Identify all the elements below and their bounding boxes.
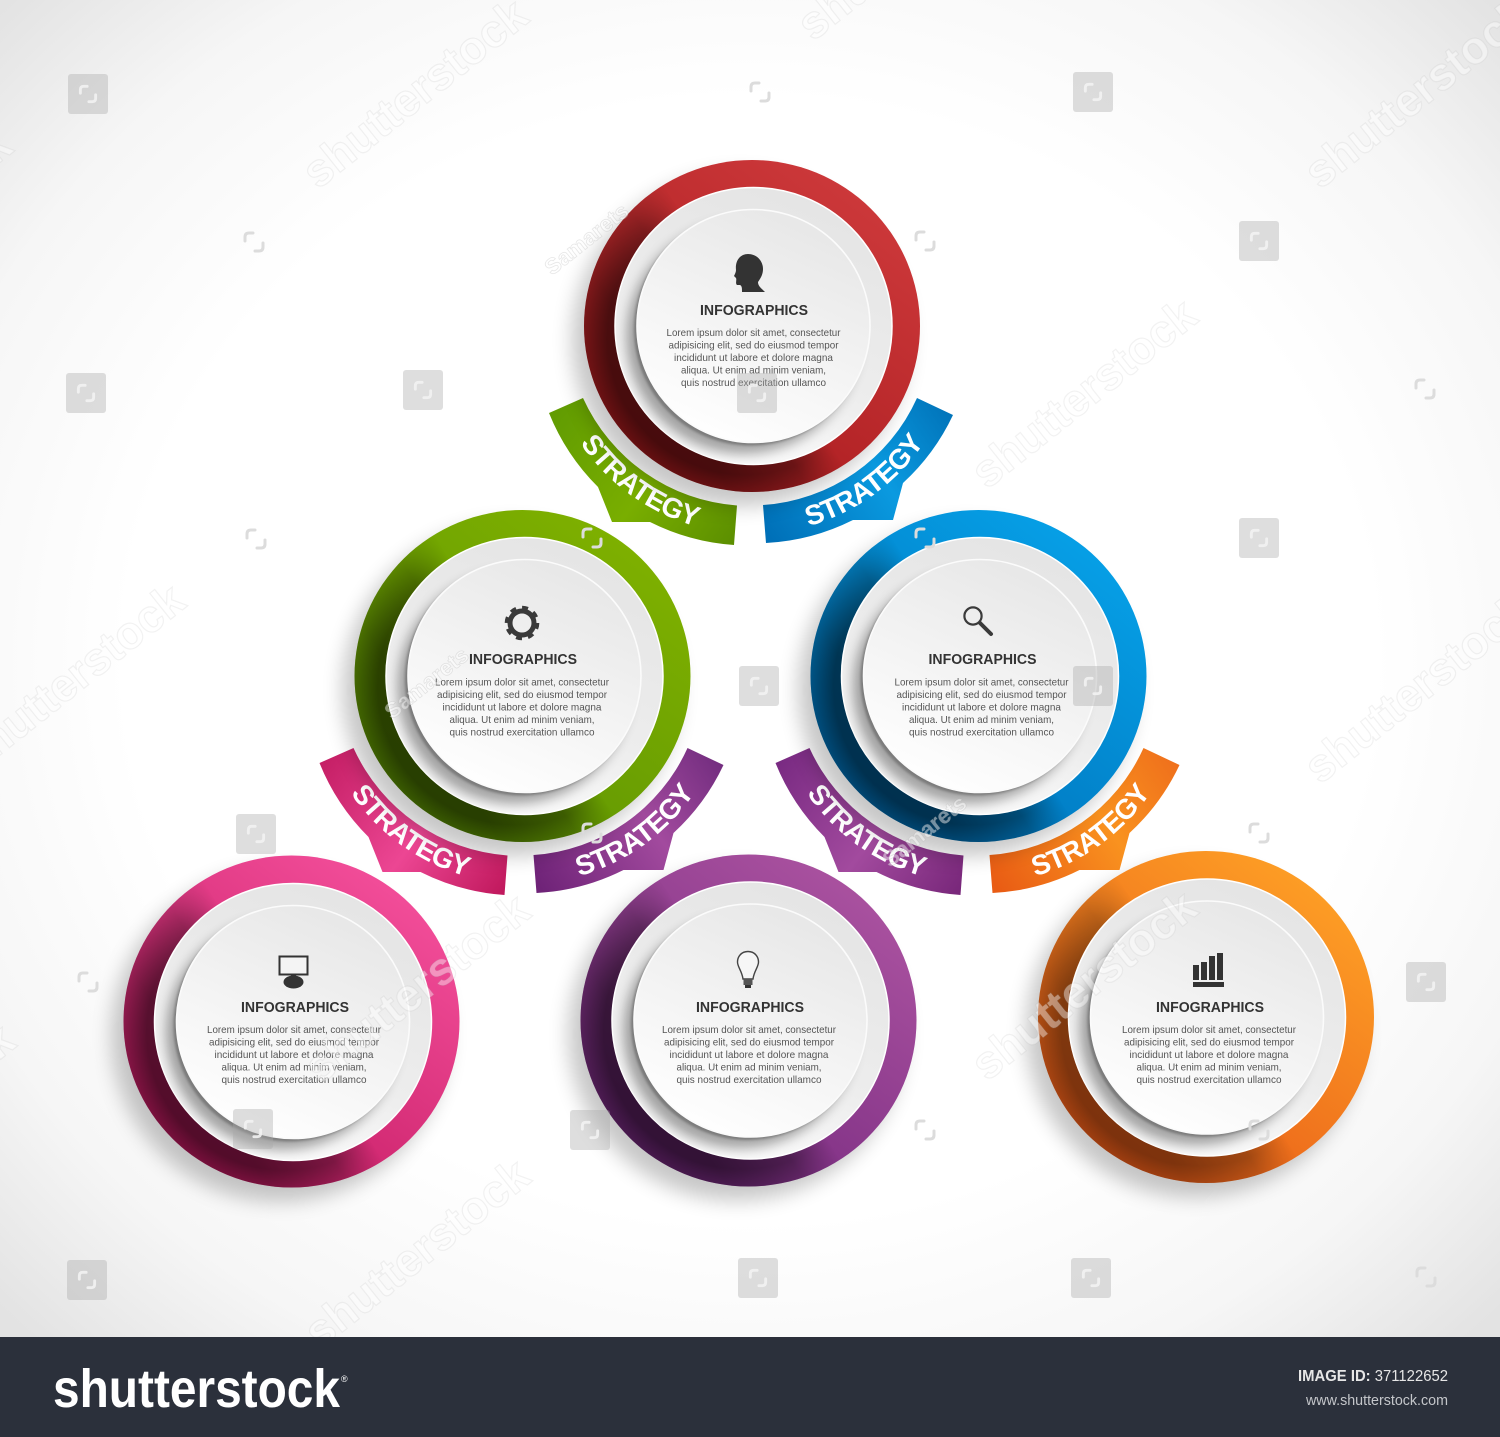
ribbon: pink strategy bbox=[320, 748, 508, 895]
watermark: stock text: Samarets bbox=[878, 790, 971, 872]
watermark: stock text: shutterstock bbox=[294, 883, 539, 1093]
circle: purple bbox=[548, 820, 948, 1220]
text: purple card bbox=[662, 1000, 837, 1086]
circle: red bbox=[552, 126, 952, 526]
ribbon group: red circle ribbons bbox=[549, 398, 953, 545]
text: red card: quis nostrud exercitation ullamco bbox=[681, 378, 826, 389]
icon: gear bbox=[506, 608, 538, 638]
text: green card: adipisicing elit, sed do eiusmod tempor bbox=[437, 690, 608, 701]
text: orange card: adipisicing elit, sed do eiusmod tempor bbox=[1124, 1038, 1295, 1048]
ribbon: purple strategy left: STRATEGY bbox=[809, 785, 928, 874]
text: orange card: Lorem ipsum dolor sit amet, consectetur bbox=[1122, 1025, 1297, 1036]
ribbon: orange strategy: STRATEGY bbox=[1032, 782, 1146, 874]
text: orange card: aliqua. Ut enim ad minim veniam, bbox=[1136, 1062, 1282, 1074]
text: purple card: quis nostrud exercitation ullamco bbox=[676, 1075, 822, 1086]
text: blue card: adipisicing elit, sed do eiusmod tempor bbox=[896, 690, 1067, 701]
text: purple card: aliqua. Ut enim ad minim veniam, bbox=[676, 1062, 822, 1074]
text: purple card: INFOGRAPHICS bbox=[696, 1000, 804, 1016]
text: pink card: adipisicing elit, sed do eiusmod tempor bbox=[209, 1038, 380, 1048]
text: red card: adipisicing elit, sed do eiusmod tempor bbox=[668, 340, 839, 352]
text: red card: Lorem ipsum dolor sit amet, consectetur bbox=[666, 328, 841, 339]
footer image id: IMAGE ID: 371122652 bbox=[1298, 1368, 1448, 1385]
watermark: stamps bbox=[66, 72, 1446, 1300]
ribbon: pink strategy: STRATEGY bbox=[353, 785, 472, 874]
text: purple card: incididunt ut labore et dolore magna bbox=[670, 1050, 829, 1061]
circle: blue bbox=[778, 476, 1178, 876]
icon: magnifier bbox=[964, 607, 991, 634]
ribbon group: blue circle ribbons bbox=[776, 748, 1180, 895]
text: blue card: quis nostrud exercitation ullamco bbox=[909, 728, 1054, 738]
watermark: stock text: shutterstock bbox=[294, 1148, 539, 1358]
ribbon: green strategy bbox=[549, 398, 737, 545]
footer bar bbox=[0, 1337, 1500, 1437]
text: orange card: INFOGRAPHICS bbox=[1156, 1000, 1264, 1016]
text: blue card: INFOGRAPHICS bbox=[928, 652, 1037, 668]
ribbon: blue strategy bbox=[763, 398, 953, 543]
text: pink card: INFOGRAPHICS bbox=[241, 1000, 349, 1016]
text: purple card: Lorem ipsum dolor sit amet, consectetur bbox=[662, 1025, 837, 1036]
text: blue card: Lorem ipsum dolor sit amet, consectetur bbox=[894, 678, 1069, 688]
text: pink card: aliqua. Ut enim ad minim veniam, bbox=[222, 1062, 366, 1074]
ribbon: purple strategy left bbox=[776, 748, 964, 895]
text: green card: aliqua. Ut enim ad minim veniam, bbox=[450, 715, 594, 726]
watermark: stock text: Samarets bbox=[380, 642, 473, 724]
ribbon: green strategy: STRATEGY bbox=[582, 435, 702, 524]
ribbon: purple strategy: STRATEGY bbox=[576, 782, 690, 874]
ribbon group: green circle ribbons bbox=[320, 748, 724, 895]
watermark: stock text: shutterstock bbox=[961, 288, 1206, 498]
ribbon: purple strategy bbox=[534, 748, 724, 893]
footer url: www.shutterstock.com bbox=[1305, 1392, 1448, 1409]
text: green card: INFOGRAPHICS bbox=[469, 652, 577, 668]
text: red card bbox=[666, 303, 841, 389]
watermark: stock text: Samarets bbox=[540, 198, 633, 280]
icon: bar chart bbox=[1193, 953, 1224, 987]
text: green card bbox=[435, 652, 610, 738]
text: blue card: incididunt ut labore et dolore magna bbox=[902, 702, 1061, 714]
watermark: small swirls bbox=[79, 83, 1435, 1286]
circle: orange bbox=[1006, 817, 1406, 1217]
text: red card: aliqua. Ut enim ad minim veniam, bbox=[681, 366, 826, 376]
text: pink card: incididunt ut labore et dolore magna bbox=[214, 1050, 374, 1061]
icon: light bulb bbox=[738, 952, 758, 988]
text: pink card: Lorem ipsum dolor sit amet, consectetur bbox=[207, 1025, 382, 1036]
text: red card: INFOGRAPHICS bbox=[700, 303, 808, 319]
text: blue card bbox=[894, 652, 1069, 738]
text: purple card: adipisicing elit, sed do eiusmod tempor bbox=[664, 1038, 835, 1048]
text: orange card bbox=[1122, 1000, 1297, 1086]
icon: head bbox=[734, 254, 765, 292]
text: green card: incididunt ut labore et dolore magna bbox=[442, 702, 602, 714]
text: green card: Lorem ipsum dolor sit amet, consectetur bbox=[435, 678, 610, 688]
text: green card: quis nostrud exercitation ullamco bbox=[450, 728, 595, 738]
text: orange card: incididunt ut labore et dolore magna bbox=[1130, 1050, 1289, 1061]
ribbon: orange strategy bbox=[990, 748, 1180, 893]
text: red card: incididunt ut labore et dolore magna bbox=[674, 353, 833, 364]
text: blue card: aliqua. Ut enim ad minim veniam, bbox=[909, 715, 1054, 726]
text: orange card: quis nostrud exercitation ullamco bbox=[1136, 1075, 1282, 1086]
circle: green bbox=[322, 476, 722, 876]
text: pink card bbox=[207, 1000, 382, 1086]
bottom row circles bbox=[92, 817, 1406, 1222]
ribbon: blue strategy: STRATEGY bbox=[806, 432, 920, 524]
text: pink card: quis nostrud exercitation ullamco bbox=[222, 1075, 367, 1086]
icon: monitor bbox=[280, 956, 308, 988]
footer registered mark: ® bbox=[341, 1374, 348, 1384]
watermark: stock text: shutterstock bbox=[961, 880, 1206, 1090]
circle: pink bbox=[92, 822, 492, 1222]
footer logo: shutterstock bbox=[53, 1359, 341, 1419]
